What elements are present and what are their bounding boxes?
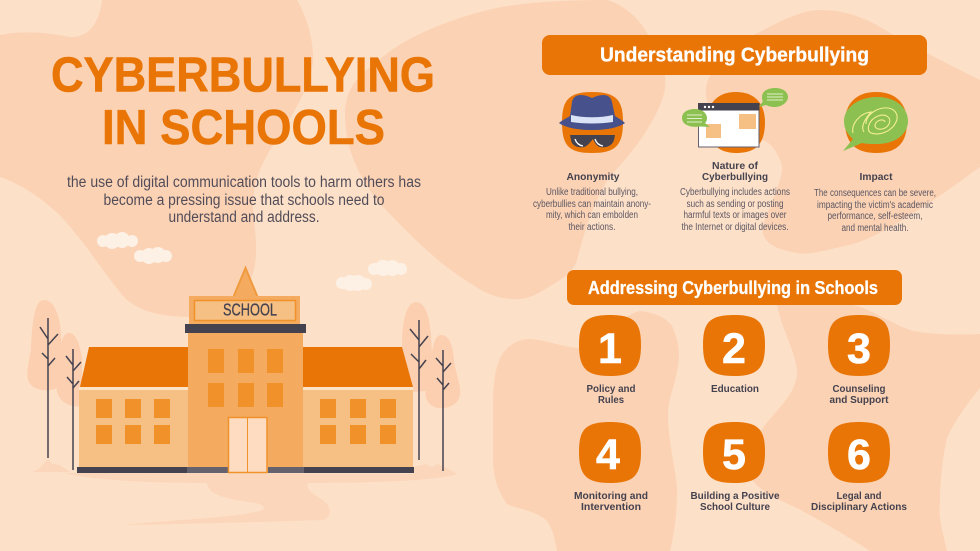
column: anonymity [533, 171, 651, 233]
step 2: Education [711, 383, 759, 395]
step 1: Rules [598, 394, 624, 406]
step 4: Monitoring and [574, 490, 648, 502]
column: nature of cyberbullying: such as sending or posting [686, 199, 784, 210]
icon: impact speech bubble [843, 92, 908, 153]
column: anonymity: their actions. [568, 222, 616, 233]
header: understanding [542, 35, 927, 75]
intro text: become a pressing issue that schools need to [104, 192, 384, 209]
step 3: 3 [847, 325, 871, 373]
header: addressing [567, 270, 902, 305]
column: anonymity: Anonymity [566, 171, 620, 183]
column: impact: and mental health. [842, 223, 908, 234]
title: CYBERBULLYING [51, 48, 435, 102]
trees [27, 300, 460, 471]
step 5: School Culture [700, 501, 770, 513]
step 6 [811, 422, 907, 513]
icon: anonymity hat [559, 92, 625, 153]
icon: browser with chat bubbles [682, 88, 788, 153]
step 6: Legal and [836, 490, 882, 502]
title [51, 48, 435, 155]
column: anonymity: mity, which can embolden [546, 210, 638, 221]
sign label: SCHOOL [223, 300, 277, 320]
column: impact: Impact [860, 171, 893, 183]
step 5 [690, 422, 780, 513]
step 4: 4 [596, 431, 620, 479]
step 6: 6 [847, 431, 871, 479]
column: nature of cyberbullying: Cyberbullying [702, 171, 768, 183]
title: IN SCHOOLS [102, 101, 385, 155]
intro text: the use of digital communication tools to harm others has [67, 174, 421, 191]
step 5: Building a Positive [690, 490, 780, 502]
header: understanding: Understanding Cyberbullying [600, 44, 869, 66]
column: nature of cyberbullying: Nature of [712, 160, 758, 172]
column: nature of cyberbullying: harmful texts or images over [684, 210, 787, 221]
step 4 [574, 422, 648, 513]
step 3: Counseling [832, 383, 886, 395]
intro text: understand and address. [168, 209, 320, 226]
clouds [97, 232, 407, 291]
column: impact: The consequences can be severe, [814, 188, 936, 199]
step 3: and Support [830, 394, 889, 406]
step 6: Disciplinary Actions [811, 501, 907, 513]
column: nature of cyberbullying [680, 160, 790, 233]
ground and path [32, 459, 457, 525]
step 1: 1 [598, 325, 622, 373]
step 2 [703, 315, 765, 395]
step 2: 2 [722, 325, 746, 373]
step 1 [579, 315, 641, 406]
school building [77, 268, 414, 473]
column: nature of cyberbullying: the Internet or digital devices. [682, 222, 788, 233]
column: anonymity: Unlike traditional bullying, [546, 187, 638, 198]
column: anonymity: cyberbullies can maintain anony- [533, 199, 651, 210]
column: impact: impacting the victim's academic [817, 200, 933, 211]
step 1: Policy and [586, 383, 636, 395]
column: nature of cyberbullying: Cyberbullying includes actions [680, 187, 790, 198]
column: impact [814, 171, 936, 234]
step 3 [828, 315, 890, 406]
column: impact: performance, self-esteem, [828, 211, 922, 222]
step 5: 5 [722, 431, 746, 479]
header: addressing: Addressing Cyberbullying in Schools [588, 278, 878, 298]
intro text [67, 174, 421, 226]
step 4: Intervention [581, 501, 641, 513]
